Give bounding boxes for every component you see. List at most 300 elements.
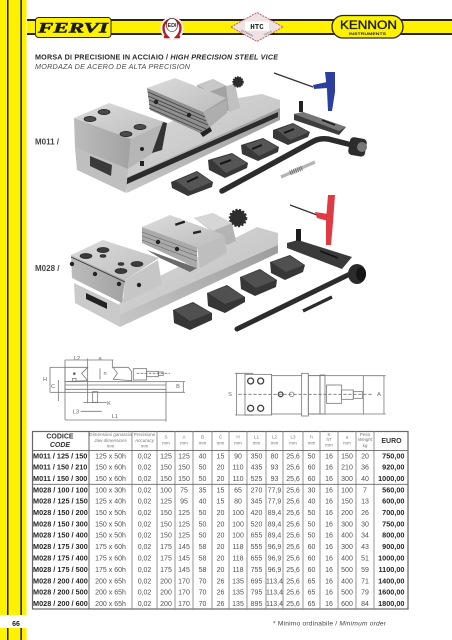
page number: 66 [12, 621, 20, 628]
socket wrench [237, 264, 366, 329]
table header: EURO [381, 438, 402, 445]
table rows: 0,02 [138, 556, 151, 562]
table header: mm [343, 440, 351, 446]
logo: HTC [231, 12, 283, 42]
table rows: 125 x 40h [95, 499, 126, 506]
table rows: 118 [232, 567, 244, 574]
table rows: 175 [160, 556, 172, 562]
table rows: 26 [361, 510, 369, 517]
table rows: 34 [361, 533, 369, 540]
rear block [197, 79, 230, 118]
table rows: M028 / 175 / 300 [33, 542, 88, 551]
table rows: 150 x 60h [95, 476, 126, 483]
table rows: 0,02 [138, 476, 151, 483]
diagram: side view labels: K [107, 401, 111, 407]
diagram: side view labels: L2 [74, 356, 80, 362]
table rows: 125 x 50h [95, 453, 126, 460]
table rows: 16 [325, 590, 333, 597]
table header: mm [107, 443, 114, 448]
table rows: 0,02 [138, 487, 151, 494]
table rows: 435 [251, 465, 262, 472]
table rows: 16 [325, 476, 333, 483]
table header: L3 [290, 434, 296, 440]
table rows: 135 [232, 601, 244, 608]
table rows: 30 [308, 487, 315, 494]
table rows: 20 [217, 476, 224, 483]
table rows: 25,6 [286, 556, 300, 562]
table rows: 60 [308, 544, 315, 551]
table rows: 77,9 [268, 487, 281, 494]
table rows: 65 [234, 487, 242, 494]
table rows: 270 [251, 487, 262, 494]
title: MORSA DI PRECISIONE IN ACCIAIO / HIGH PRECISION STEEL VICE [35, 52, 278, 62]
table header: Precisione [134, 432, 156, 437]
label: M011: M011 / [35, 138, 60, 146]
table rows: 20 [217, 510, 224, 517]
table rows: 800,00 [382, 531, 404, 540]
table rows: 170 [178, 578, 190, 585]
logo: KENNON Instruments [332, 16, 403, 38]
table rows: 40 [199, 453, 206, 460]
table header: Jaw dimensions [93, 438, 128, 443]
table rows: 100 x 30h [95, 487, 126, 494]
table header: mm [199, 440, 206, 446]
logo: HTC: EXTERNAL [240, 28, 255, 38]
table rows: 655 [251, 556, 262, 562]
table rows: 93 [271, 465, 278, 472]
table rows: 170 [178, 590, 190, 597]
table rows: 655 [251, 533, 262, 540]
table rows: 1600,00 [378, 588, 404, 597]
table header: a [346, 434, 349, 440]
diagram: top view labels [228, 392, 381, 398]
table rows: 0,02 [138, 499, 151, 506]
table rows: 50 [308, 521, 315, 528]
table rows: 60 [308, 465, 315, 472]
table rows: 25,6 [286, 544, 300, 551]
table rows: 113,4 [266, 578, 283, 585]
table rows: 300 [341, 521, 353, 528]
table rows: M028 / 200 / 600 [33, 599, 88, 608]
t-nuts [171, 123, 310, 196]
knob [233, 77, 243, 87]
table rows: 20 [217, 521, 224, 528]
table rows: 40 [308, 499, 315, 506]
table rows: 210 [341, 465, 353, 472]
diagram: side view labels: L3 [73, 410, 79, 416]
table rows: 0,02 [138, 601, 151, 608]
table rows: M028 / 150 / 300 [33, 519, 88, 528]
table rows: 20 [361, 453, 369, 460]
table header: mm [217, 440, 224, 446]
table rows: 25,6 [286, 567, 300, 574]
logo: EDI: EDI [168, 23, 177, 29]
table rows: 80 [234, 499, 242, 506]
table rows: 25,6 [286, 578, 300, 585]
table rows: M028 / 175 / 500 [33, 565, 88, 574]
table header: mm [180, 440, 188, 446]
table rows: 113,4 [266, 590, 283, 597]
table rows: 150 [160, 476, 172, 483]
table rows: M028 / 100 / 100 [33, 485, 88, 494]
table rows: 150 x 50h [95, 521, 126, 528]
table rows: 118 [232, 544, 244, 551]
table rows: 59 [361, 567, 369, 574]
table rows: 200 [160, 601, 172, 608]
t-key: red [290, 195, 335, 245]
table rows: 750,00 [382, 451, 404, 460]
table rows: 895 [251, 601, 262, 608]
table rows: M011 / 150 / 210 [33, 463, 87, 472]
table rows: 400 [341, 533, 353, 540]
moving jaw [147, 78, 226, 112]
table rows: 0,02 [138, 590, 151, 597]
logo: KENNON Instruments: KENNON [340, 20, 397, 32]
title [35, 52, 278, 71]
table rows: 125 [178, 510, 190, 517]
table rows: 145 [178, 544, 190, 551]
table rows: 16 [325, 533, 333, 540]
table rows: 175 x 60h [95, 567, 126, 574]
table rows: 0,02 [138, 567, 151, 574]
table rows: 51 [361, 556, 369, 562]
logo: EDI [160, 17, 184, 40]
table rows: 50 [308, 453, 315, 460]
top yellow band [27, 19, 452, 35]
table rows: 150 x 50h [95, 510, 126, 517]
table rows: 20 [217, 556, 224, 562]
table rows: 145 [178, 556, 190, 562]
moving jaw [142, 215, 224, 247]
table rows: 60 [308, 567, 315, 574]
table rows: 65 [308, 590, 315, 597]
table rows: 77,9 [268, 499, 281, 506]
table rows [33, 451, 404, 608]
table rows: 750,00 [382, 519, 404, 528]
table rows: 600 [341, 601, 353, 608]
table rows: 175 [160, 567, 172, 574]
table rows: M028 / 200 / 500 [33, 588, 88, 597]
table rows: 25,6 [286, 601, 300, 608]
table rows: 1000,00 [378, 474, 404, 483]
table rows: 16 [325, 521, 333, 528]
table rows: 700,00 [382, 508, 404, 517]
table rows: 20 [217, 533, 224, 540]
table header: mm [162, 440, 170, 446]
diagram: top view labels: S [228, 392, 232, 398]
fixed jaw [71, 240, 159, 280]
fixed jaw top [74, 103, 167, 139]
table header: K [327, 432, 331, 437]
table rows: 16 [325, 499, 333, 506]
table rows: 560,00 [382, 485, 404, 494]
table rows: 520 [251, 521, 262, 528]
table rows: 25,6 [286, 453, 300, 460]
table rows: M028 / 150 / 400 [33, 531, 88, 540]
photo: M011 vice with accessories [74, 72, 367, 196]
table rows: 110 [232, 476, 244, 483]
clamp plate [287, 229, 352, 269]
table header: Dimensioni ganascia [89, 432, 132, 437]
table rows: 50 [308, 510, 315, 517]
knob [230, 210, 246, 226]
table rows: 26 [217, 601, 224, 608]
logo: KENNON Instruments: INSTRUMENTS [349, 31, 386, 36]
rail top surface [118, 227, 278, 315]
table rows: 555 [251, 544, 262, 551]
table rows: 15 [217, 499, 224, 506]
table rows: 15 [217, 487, 224, 494]
table rows: 58 [199, 556, 206, 562]
clamp plate [294, 101, 346, 135]
table header: Accuracy [134, 438, 155, 443]
table header: mm [271, 440, 278, 446]
table header: A [182, 434, 186, 440]
table header: H [236, 434, 240, 440]
table rows: 60 [308, 476, 315, 483]
diagram: side view labels: H [43, 377, 47, 383]
table rows: 118 [232, 556, 244, 562]
photo: M028 vice with accessories [70, 195, 366, 330]
table rows: 36 [361, 465, 369, 472]
table header: Weight [358, 437, 373, 442]
table rows: 7 [363, 487, 367, 494]
table rows: 900,00 [382, 542, 404, 551]
table header: L2 [272, 434, 277, 440]
table rows: 58 [199, 567, 206, 574]
table rows: 16 [325, 556, 333, 562]
table rows: 125 [178, 533, 190, 540]
table rows: 40 [361, 476, 369, 483]
table rows: 40 [199, 499, 206, 506]
table rows: 200 x 65h [95, 601, 126, 608]
table rows: 100 [232, 510, 244, 517]
table rows: 150 [341, 453, 353, 460]
table rows: 71 [361, 578, 369, 585]
table rows: 0,02 [138, 533, 151, 540]
table rows: 50 [199, 510, 206, 517]
table rows: M028 / 175 / 400 [33, 554, 88, 562]
table rows: 89,4 [268, 521, 281, 528]
logo: FERVI: FERVI [36, 20, 110, 36]
table rows: 400 [341, 556, 353, 562]
table rows: 70 [199, 578, 206, 585]
table rows: 35 [199, 487, 206, 494]
table rows: 300 [341, 544, 353, 551]
t-nuts [173, 255, 305, 330]
table rows: 15 [217, 453, 224, 460]
table rows: 755 [251, 567, 262, 574]
table header: C [219, 434, 223, 440]
logo: HTC: HTC [250, 24, 264, 32]
table rows: 70 [199, 601, 206, 608]
table rows: 26 [217, 578, 224, 585]
table rows: 110 [232, 465, 244, 472]
table rows: 350 [251, 453, 262, 460]
table: price list [32, 431, 408, 609]
table rows: 500 [341, 590, 353, 597]
table rows: 175 x 60h [95, 544, 126, 551]
table rows: 20 [217, 567, 224, 574]
table rows: 150 x 50h [95, 533, 126, 540]
diagram: side view labels: B [176, 384, 180, 390]
table rows: 300 [341, 476, 353, 483]
table header: CODICE [46, 434, 74, 440]
table rows: 30 [361, 521, 369, 528]
table header: Peso [360, 432, 371, 437]
table rows: 16 [325, 453, 333, 460]
table rows: 200 [160, 590, 172, 597]
table rows: 150 [341, 499, 353, 506]
table rows: 0,02 [138, 453, 151, 460]
table rows: 150 [160, 521, 172, 528]
rail front [125, 108, 280, 193]
table rows: 65 [308, 578, 315, 585]
diagram: top view labels: A [377, 392, 381, 398]
table rows: 50 [199, 476, 206, 483]
title: MORDAZA DE ACERO DE ALTA PRECISION [35, 62, 191, 71]
table rows: 200 [160, 578, 172, 585]
table rows: 13 [361, 499, 369, 506]
table rows: 90 [234, 453, 242, 460]
table rows: 100 [232, 533, 244, 540]
table rows: 1000,00 [378, 554, 404, 562]
table header: mm [289, 440, 297, 446]
table rows: 16 [325, 567, 333, 574]
table rows: 345 [251, 499, 262, 506]
table rows: 0,02 [138, 544, 151, 551]
table rows: 200 [341, 510, 353, 517]
table header: h [310, 434, 313, 440]
table rows: 1400,00 [378, 576, 404, 585]
logo: HTC: TOOLS [263, 29, 273, 37]
table rows: M011 / 150 / 300 [33, 474, 87, 483]
table rows: 60 [308, 556, 315, 562]
table rows: 150 [160, 465, 172, 472]
table rows: 25,6 [286, 465, 300, 472]
table rows: 43 [361, 544, 369, 551]
table rows: 84 [361, 601, 369, 608]
diagram: side view [50, 358, 185, 422]
rail front [118, 245, 278, 327]
table header: mm [325, 442, 333, 448]
table rows: 100 [232, 521, 244, 528]
table rows: 80 [271, 453, 278, 460]
logo: FERVI [36, 18, 111, 38]
table rows: 695 [251, 578, 262, 585]
table rows: 170 [178, 601, 190, 608]
table rows: 16 [325, 601, 333, 608]
table rows: 795 [251, 590, 262, 597]
table rows: 920,00 [382, 463, 404, 472]
table rows: 16 [325, 544, 333, 551]
table rows: 96,9 [268, 556, 281, 562]
table rows: 0,02 [138, 465, 151, 472]
diagram: side view labels: C [51, 384, 55, 390]
table rows: 25,6 [286, 476, 300, 483]
base [74, 283, 120, 327]
table rows: 500 [341, 567, 353, 574]
table rows: 50 [199, 465, 206, 472]
table rows: 420 [251, 510, 262, 517]
diagram: side view labels: L1 [112, 414, 118, 420]
table rows: 175 [160, 544, 172, 551]
table rows: 16 [325, 510, 333, 517]
table rows: M028 / 200 / 400 [33, 576, 88, 585]
table rows: 75 [180, 487, 188, 494]
table rows: 16 [325, 578, 333, 585]
table rows: 58 [199, 544, 206, 551]
table header: h7 [326, 437, 332, 442]
left yellow stripe [0, 0, 26, 640]
table rows: 0,02 [138, 578, 151, 585]
table header: L1 [254, 434, 259, 440]
table rows: 175 x 60h [95, 556, 126, 562]
footnote: * Minimo ordinabile / Minimum order [273, 620, 387, 627]
table rows: 96,9 [268, 567, 281, 574]
table rows: 25,6 [286, 533, 300, 540]
table rows: 150 x 60h [95, 465, 126, 472]
table rows: 79 [361, 590, 369, 597]
rear block [194, 213, 236, 245]
table rows: 89,4 [268, 533, 281, 540]
table rows: 95 [180, 499, 188, 506]
table rows: 125 [178, 521, 190, 528]
table rows: 125 [160, 453, 172, 460]
table header [46, 432, 402, 449]
table rows: 20 [217, 544, 224, 551]
rail top surface [120, 94, 280, 180]
table rows: 89,4 [268, 510, 281, 517]
table rows: 0,02 [138, 521, 151, 528]
table rows: 1100,00 [379, 565, 404, 574]
table rows: 150 [160, 533, 172, 540]
table rows: 125 [160, 499, 172, 506]
t-key: blue [274, 72, 335, 111]
table rows: 25,6 [286, 590, 300, 597]
diagram: side view labels: a [98, 356, 102, 362]
table rows: 150 [160, 510, 172, 517]
table rows: 135 [232, 590, 244, 597]
table rows: 150 [178, 476, 190, 483]
table rows: 96,9 [268, 544, 281, 551]
table rows: 525 [251, 476, 262, 483]
diagram: side view labels: n [103, 371, 107, 377]
table rows: 400 [341, 578, 353, 585]
silver screw [281, 162, 315, 177]
table header: B [201, 434, 204, 440]
table rows: 16 [325, 487, 333, 494]
table rows: 25,6 [286, 521, 300, 528]
table rows: 50 [308, 533, 315, 540]
table rows: 113,4 [266, 601, 283, 608]
table header: S [164, 434, 168, 440]
table rows: 1800,00 [378, 599, 404, 608]
label: M028: M028 / [35, 264, 60, 273]
diagram: side view labels [43, 356, 180, 420]
table header: mm [234, 440, 242, 446]
table rows: 100 [160, 487, 172, 494]
black screw [303, 297, 332, 311]
table rows: 25,6 [286, 499, 300, 506]
socket wrench [222, 137, 367, 191]
table rows: 600,00 [382, 497, 404, 506]
table rows: 26 [217, 590, 224, 597]
table rows: 70 [199, 590, 206, 597]
table rows: M028 / 125 / 150 [33, 497, 88, 506]
table rows: 20 [217, 465, 224, 472]
table rows: 93 [271, 476, 278, 483]
